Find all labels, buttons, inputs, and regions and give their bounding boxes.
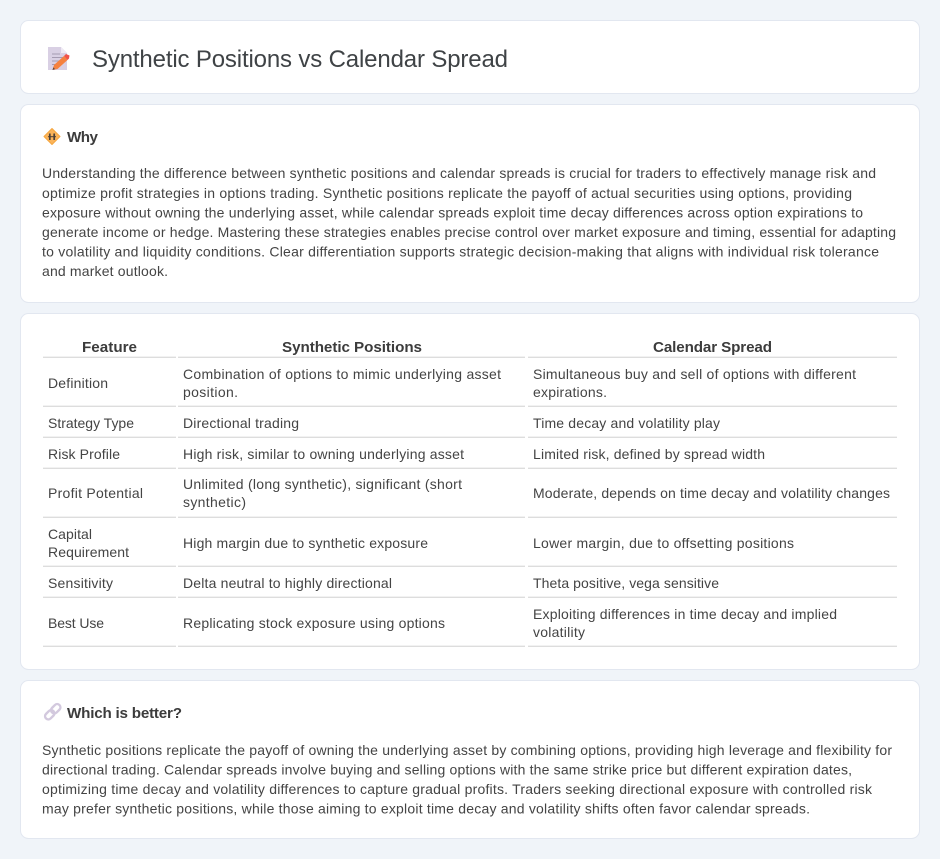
panel: which is better bbox=[20, 680, 920, 838]
text block: which is better: may prefer synthetic positions, while those aiming to exploit time decay and volatility shifts often favor calendar spreads. bbox=[42, 800, 810, 816]
row: best use bbox=[48, 606, 837, 640]
row: profit potential: Profit Potential bbox=[48, 485, 143, 501]
panel: header bbox=[20, 20, 920, 94]
heading: why: Why bbox=[67, 129, 99, 146]
icon: warning diamond bbox=[44, 128, 60, 144]
table header bbox=[82, 339, 772, 356]
row: profit potential bbox=[48, 476, 890, 510]
text block: why: Understanding the difference between synthetic positions and calendar spreads is crucial for traders to effectively manage risk and bbox=[42, 165, 876, 181]
row: strategy type: Directional trading bbox=[183, 415, 299, 431]
row: capital requirement bbox=[48, 526, 794, 560]
row: risk profile: Risk Profile bbox=[48, 446, 120, 462]
row: capital requirement: High margin due to synthetic exposure bbox=[183, 535, 428, 551]
text block: why: to volatility and liquidity conditions. Clear differentiation supports strategic decision-making that aligns with individual risk tolerance bbox=[42, 244, 879, 260]
row: risk profile bbox=[48, 446, 765, 462]
text block: why bbox=[42, 165, 896, 279]
row: definition: position. bbox=[183, 384, 238, 400]
row: capital requirement: Lower margin, due to offsetting positions bbox=[533, 535, 794, 551]
row: profit potential: synthetic) bbox=[183, 494, 246, 510]
text block: which is better: Synthetic positions replicate the payoff of owning the underlying asset by combining options, providing high leverage and flexibility for bbox=[42, 742, 892, 758]
table header: Calendar Spread bbox=[653, 339, 772, 356]
heading: which is better: Which is better? bbox=[67, 705, 182, 722]
text block: which is better: optimizing time decay and volatility differences to capture gradual profits. Traders seeking directional exposure with controlled risk bbox=[42, 781, 873, 797]
text block: why: optimize profit strategies in options trading. Synthetic positions replicate the payoff of actual securities using options, providing bbox=[42, 185, 852, 201]
row: sensitivity: Theta positive, vega sensitive bbox=[533, 575, 719, 591]
row: best use: Exploiting differences in time decay and implied bbox=[533, 606, 837, 622]
row: strategy type: Strategy Type bbox=[48, 415, 134, 431]
text block: why: exposure without owning the underlying asset, while calendar spreads exploit time decay differences across option expirations to bbox=[42, 204, 863, 220]
text block: which is better bbox=[42, 742, 892, 816]
table header: Feature bbox=[82, 339, 137, 356]
row: definition bbox=[48, 366, 856, 400]
row: sensitivity: Sensitivity bbox=[48, 575, 113, 591]
row: best use: Best Use bbox=[48, 615, 104, 631]
row: sensitivity: Delta neutral to highly directional bbox=[183, 575, 392, 591]
row: profit potential: Unlimited (long synthetic), significant (short bbox=[183, 476, 462, 492]
panel: why bbox=[20, 104, 920, 302]
row: strategy type: Time decay and volatility play bbox=[533, 415, 720, 431]
table header: Synthetic Positions bbox=[282, 339, 422, 356]
row: profit potential: Moderate, depends on time decay and volatility changes bbox=[533, 485, 890, 501]
row: capital requirement: Requirement bbox=[48, 544, 129, 560]
row: capital requirement: Capital bbox=[48, 526, 92, 542]
text block: why: generate income or hedge. Mastering these strategies enables precise control over market exposure and timing, essential for adapting bbox=[42, 224, 896, 240]
row: definition: Definition bbox=[48, 375, 108, 391]
icon: link bbox=[44, 703, 62, 721]
row: strategy type bbox=[48, 415, 720, 431]
row: risk profile: Limited risk, defined by spread width bbox=[533, 446, 765, 462]
row: definition: Simultaneous buy and sell of options with different bbox=[533, 366, 856, 382]
row: sensitivity bbox=[48, 575, 719, 591]
panel: comparison table bbox=[20, 314, 920, 670]
row: best use: volatility bbox=[533, 624, 585, 640]
text block: why: and market outlook. bbox=[42, 263, 168, 279]
row: best use: Replicating stock exposure using options bbox=[183, 615, 445, 631]
row: risk profile: High risk, similar to owning underlying asset bbox=[183, 446, 464, 462]
row: definition: Combination of options to mimic underlying asset bbox=[183, 366, 501, 382]
title: Synthetic Positions vs Calendar Spread bbox=[92, 46, 508, 73]
text block: which is better: directional trading. Calendar spreads involve buying and selling options with the same strike price but different expiration dates, bbox=[42, 762, 852, 778]
icon: document with pencil bbox=[48, 47, 70, 70]
row: definition: expirations. bbox=[533, 384, 607, 400]
